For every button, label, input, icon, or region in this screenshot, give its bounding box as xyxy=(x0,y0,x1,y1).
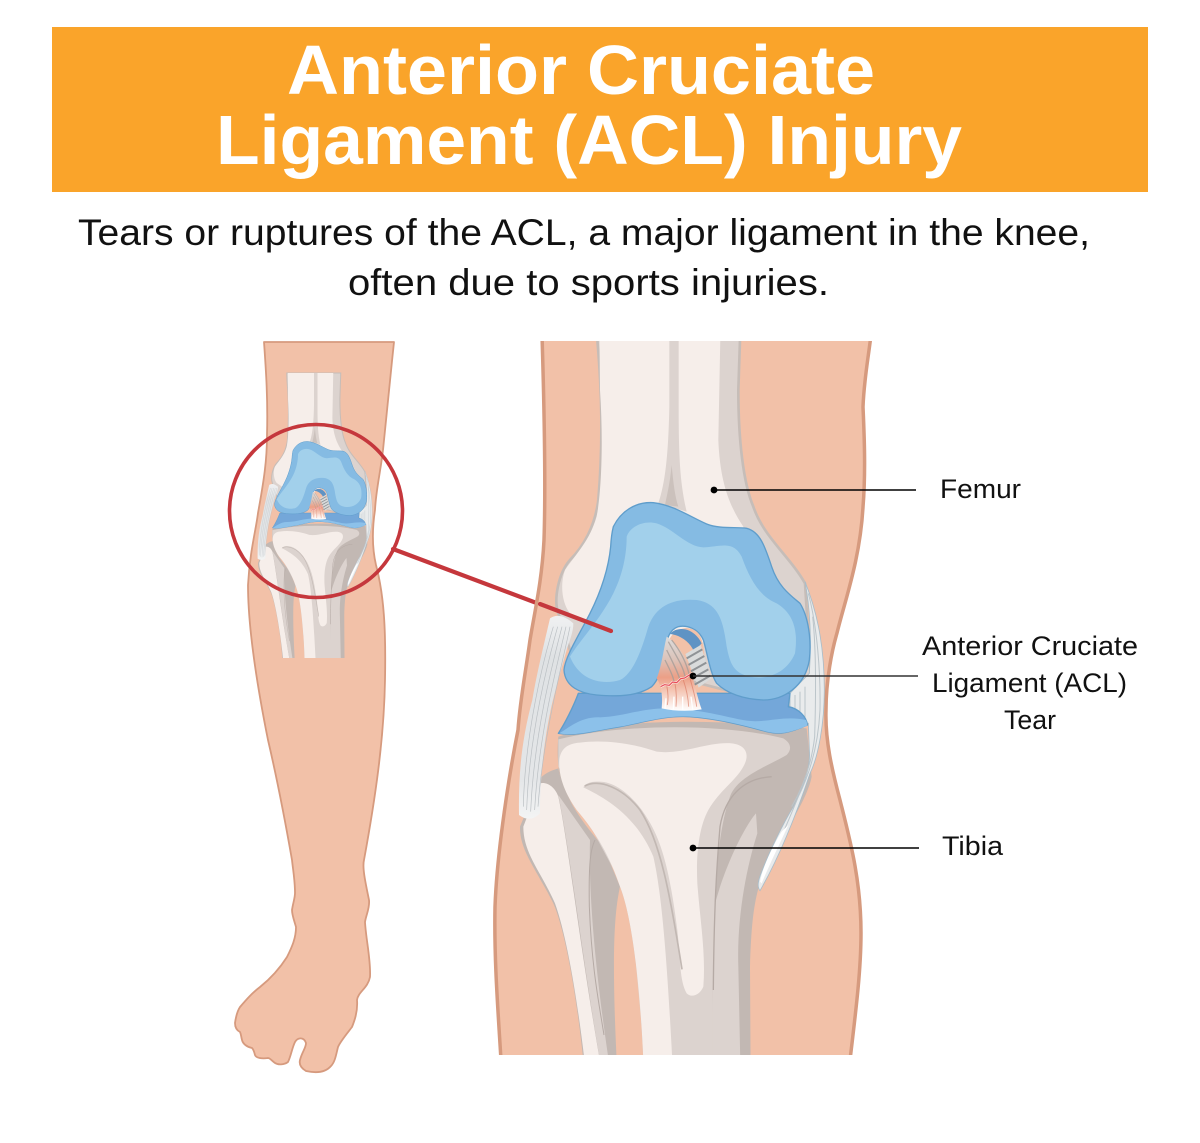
title text xyxy=(216,31,962,179)
subtitle xyxy=(78,212,1090,303)
label: femur: Femur xyxy=(940,474,1021,504)
title text: Ligament (ACL) Injury xyxy=(216,101,962,179)
label: femur xyxy=(711,474,1021,504)
enlarged knee anatomy xyxy=(519,320,824,1080)
enlarged knee skin xyxy=(495,335,871,1060)
small knee anatomy xyxy=(258,373,372,658)
full leg illustration xyxy=(235,342,394,1072)
red connector tip over knee xyxy=(540,604,611,631)
label: ACL tear: Anterior Cruciate xyxy=(922,631,1138,661)
label: ACL tear xyxy=(690,631,1138,735)
label: ACL tear: Tear xyxy=(1004,705,1056,735)
label: ACL tear: Ligament (ACL) xyxy=(932,668,1127,698)
title banner xyxy=(52,27,1148,192)
label: tibia: Tibia xyxy=(942,831,1004,861)
label: tibia xyxy=(690,831,1004,861)
leg silhouette xyxy=(235,342,394,1072)
subtitle: Tears or ruptures of the ACL, a major ligament in the knee, xyxy=(78,212,1090,253)
enlarged knee illustration xyxy=(495,320,871,1080)
zoom circle and connector xyxy=(230,424,611,631)
title text: Anterior Cruciate xyxy=(287,31,875,109)
subtitle: often due to sports injuries. xyxy=(348,262,829,303)
